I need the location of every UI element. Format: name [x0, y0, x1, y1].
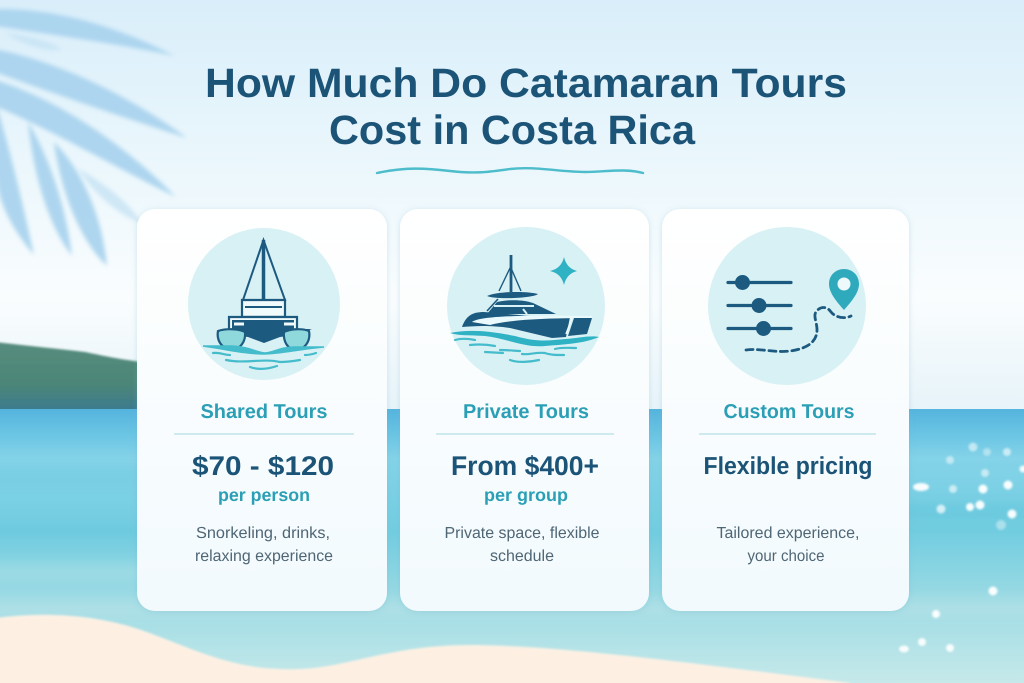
description: private tours: Private space, flexible [444, 525, 600, 542]
panel: private tours [400, 209, 649, 611]
flybridge roof [487, 292, 538, 298]
price: private tours: From $400+ [451, 451, 599, 481]
heading: private tours: Private Tours [463, 401, 589, 423]
icon: sliders and route pin [708, 227, 866, 385]
title: Cost in Costa Rica [329, 107, 696, 153]
background: sand [0, 615, 850, 683]
background: island [0, 342, 160, 412]
description: shared tours: Snorkeling, drinks, [196, 525, 330, 542]
title: How Much Do Catamaran Tours [205, 60, 847, 106]
price unit: per group: per group [484, 485, 568, 505]
mast [510, 255, 512, 292]
title [205, 60, 847, 153]
description: custom tours: Tailored experience, [716, 525, 860, 542]
background: water bands [0, 472, 1024, 616]
description: custom tours [716, 525, 860, 565]
background: sky [0, 0, 1024, 415]
icon: sparkle [550, 257, 577, 285]
heading: shared tours: Shared Tours [200, 401, 328, 423]
cabin [487, 300, 556, 314]
panel: shared tours [137, 209, 387, 611]
price: shared tours: $70 - $120 [192, 451, 334, 481]
icon: motor yacht [447, 227, 605, 385]
title wave underline [377, 168, 643, 173]
background: sea [0, 409, 1024, 683]
bow wave [450, 331, 599, 346]
icon: catamaran [188, 228, 340, 380]
panel: custom tours [662, 209, 909, 611]
description: private tours: schedule [490, 548, 554, 565]
heading: custom tours: Custom Tours [724, 401, 854, 423]
price: custom tours: Flexible pricing [704, 453, 872, 480]
description: shared tours: relaxing experience [195, 548, 333, 565]
price unit: per person: per person [218, 485, 310, 505]
description: shared tours [195, 525, 333, 565]
background: palm leaves [0, 9, 187, 266]
background: sun sparkles [899, 442, 1024, 652]
description: private tours [444, 525, 600, 565]
hull [462, 312, 570, 338]
description: custom tours: your choice [748, 548, 825, 565]
